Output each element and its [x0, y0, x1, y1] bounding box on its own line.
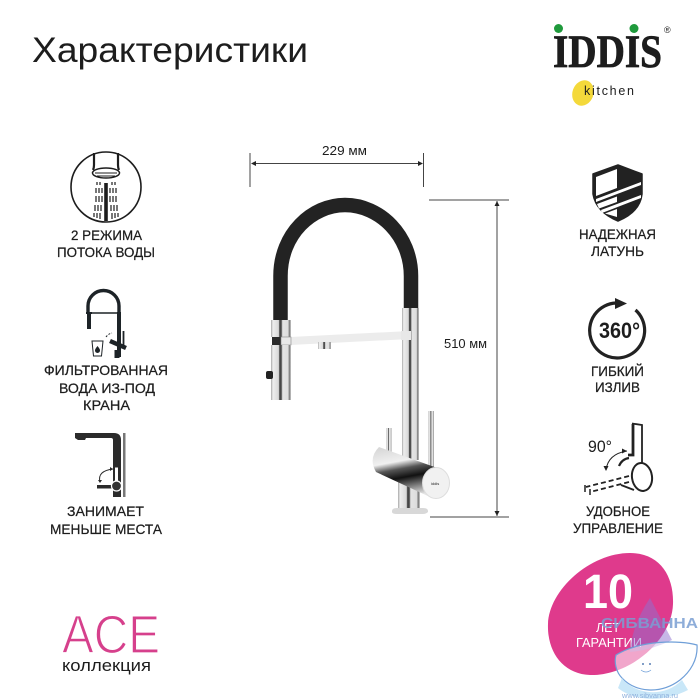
right chrome column	[402, 308, 419, 460]
icon: takes less space	[75, 433, 126, 497]
icon: two flow modes	[71, 152, 141, 222]
icon: 90 degree lever	[585, 424, 654, 495]
spray head	[271, 320, 291, 337]
logo: IDDIS kitchen: kitchen	[584, 84, 634, 98]
logo: IDDIS kitchen: IDDIS	[553, 26, 662, 78]
logo: IDDIS kitchen: ®	[664, 25, 671, 35]
label: reliable brass: ЛАТУНЬ	[591, 243, 644, 259]
label: flexible spout: ИЗЛИВ	[595, 379, 640, 395]
title: Характеристики	[32, 31, 308, 70]
label: filtered water: ФИЛЬТРОВАННАЯ	[44, 362, 168, 378]
warranty badge: ГАРАНТИИ	[576, 636, 642, 650]
label: filtered water: КРАНА	[83, 397, 131, 413]
watermark: Sibvanna: www.sibvanna.ru	[621, 693, 678, 700]
dimension: width 229 mm: 229 мм	[322, 143, 367, 158]
icon: 90 degree lever: 90°	[588, 437, 612, 456]
cross bar	[290, 331, 410, 345]
valve body	[373, 447, 440, 497]
faucet illustration	[266, 205, 450, 514]
label: 2 modes	[57, 227, 155, 260]
black flexible hose	[280, 205, 411, 321]
warranty badge: 10	[583, 566, 633, 619]
label: 2 modes: 2 РЕЖИМА	[71, 227, 143, 243]
label: reliable brass	[579, 226, 656, 259]
base and stem	[398, 478, 420, 510]
icon: 360 rotation: 360°	[599, 318, 640, 343]
icon: 360 rotation	[590, 298, 645, 358]
icon: reliable brass shield	[593, 165, 642, 221]
label: convenient control: УПРАВЛЕНИЕ	[573, 520, 663, 536]
label: filtered water	[44, 362, 168, 413]
label: takes less space	[50, 503, 163, 537]
watermark: Sibvanna	[601, 598, 699, 700]
dimension: width 229 mm	[250, 143, 424, 187]
label: takes less space: ЗАНИМАЕТ	[67, 503, 144, 519]
label: takes less space: МЕНЬШЕ МЕСТА	[50, 521, 163, 537]
label: flexible spout: ГИБКИЙ	[591, 362, 644, 379]
warranty badge: ЛЕТ	[596, 621, 620, 635]
collection name: коллекция	[62, 657, 151, 675]
label: reliable brass: НАДЕЖНАЯ	[579, 226, 656, 242]
label: 2 modes: ПОТОКА ВОДЫ	[57, 244, 155, 260]
label: convenient control	[573, 503, 663, 536]
dimension: height 510 mm	[429, 200, 509, 517]
collection name: ACE	[62, 605, 160, 665]
watermark: Sibvanna: СИБВАННА	[601, 616, 699, 632]
logo: IDDIS kitchen	[553, 24, 671, 109]
icon: filtered water faucet	[86, 290, 126, 358]
label: flexible spout	[591, 362, 644, 395]
faucet illustration: iddis	[431, 481, 439, 486]
label: filtered water: ВОДА ИЗ-ПОД	[59, 380, 156, 396]
levers	[428, 411, 434, 471]
label: convenient control: УДОБНОЕ	[586, 503, 650, 519]
warranty badge	[548, 553, 673, 675]
dimension: height 510 mm: 510 мм	[444, 336, 487, 351]
